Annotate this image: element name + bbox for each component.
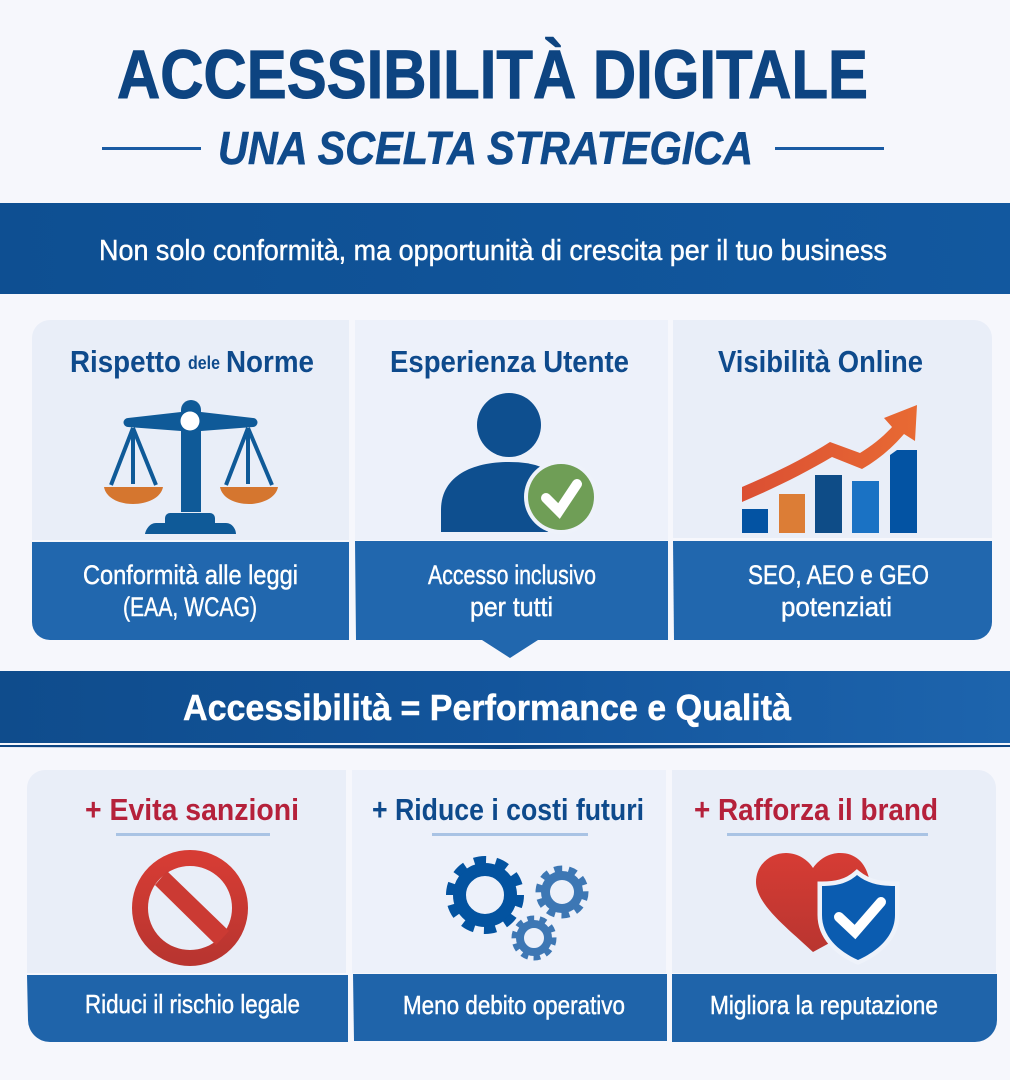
heading: rispetto delle norme: dele xyxy=(188,353,220,373)
caption: reputazione xyxy=(672,974,997,1042)
band: performance e qualità xyxy=(0,671,1010,749)
icon: user with check xyxy=(441,393,598,534)
icon: scales xyxy=(104,400,278,534)
banner xyxy=(0,203,1010,294)
caption: accesso inclusivo: per tutti xyxy=(470,592,553,622)
panel: evita sanzioni xyxy=(27,770,348,1042)
icon: growth chart xyxy=(742,405,917,533)
caption: conformità: Conformità alle leggi xyxy=(83,560,298,590)
caption: conformità: (EAA, WCAG) xyxy=(123,592,257,622)
icon: prohibition sign xyxy=(140,858,240,958)
heading: visibilità online: Visibilità Online xyxy=(718,344,923,379)
banner: Non solo conformità, ma opportunità di crescita per il tuo business xyxy=(99,235,887,267)
band: performance e qualità: Accessibilità = Performance e Qualità xyxy=(183,687,792,728)
heading: rispetto delle norme: Rispetto xyxy=(70,344,181,379)
panel: esperienza utente xyxy=(355,320,668,658)
title: ACCESSIBILITÀ DIGITALE xyxy=(117,36,868,113)
caption: rischio legale xyxy=(27,975,348,1042)
heading: rafforza il brand: + Rafforza il brand xyxy=(694,792,938,827)
caption: seo aeo geo xyxy=(673,541,992,640)
panel: visibilità online xyxy=(673,320,992,640)
caption: accesso inclusivo: Accesso inclusivo xyxy=(428,560,596,590)
caption: reputazione: Migliora la reputazione xyxy=(710,990,938,1020)
panel: rafforza il brand xyxy=(672,770,997,1042)
panel: riduce i costi futuri xyxy=(352,770,667,1041)
heading: rispetto delle norme: Norme xyxy=(226,344,314,379)
subtitle with side rules: UNA SCELTA STRATEGICA xyxy=(218,122,753,174)
icon: heart and shield xyxy=(756,853,895,960)
caption: seo aeo geo: SEO, AEO e GEO xyxy=(748,560,929,590)
heading: rispetto delle norme xyxy=(70,344,314,379)
caption: conformità xyxy=(32,542,349,640)
caption: rischio legale: Riduci il rischio legale xyxy=(85,989,300,1019)
panel: rispetto delle norme xyxy=(32,320,349,640)
heading: riduce i costi futuri: + Riduce i costi futuri xyxy=(372,792,644,827)
icon: gears xyxy=(450,860,586,958)
caption: seo aeo geo: potenziati xyxy=(781,592,892,622)
heading: evita sanzioni: + Evita sanzioni xyxy=(85,792,299,827)
caption: accesso inclusivo xyxy=(355,541,668,658)
caption: debito operativo: Meno debito operativo xyxy=(403,990,625,1020)
heading: esperienza utente: Esperienza Utente xyxy=(390,344,629,379)
caption: debito operativo xyxy=(353,974,667,1041)
